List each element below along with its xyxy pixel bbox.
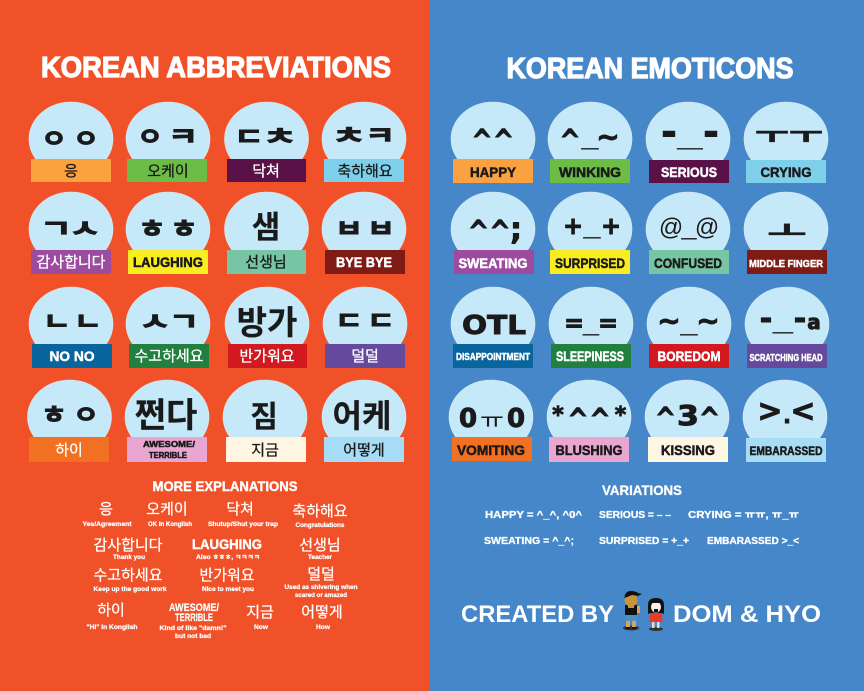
emoticon: happy: [451, 102, 535, 183]
emoticon: surprised: SURPRISED: [555, 255, 625, 271]
explanation: 하이: 하이: [97, 602, 125, 619]
explanation: 덜덜: 덜덜: [307, 566, 335, 583]
explanation: 오케이: OK in Konglish: [148, 521, 192, 528]
emoticon: crying: ㅜㅜ: [755, 123, 823, 148]
face: ㅅㄱ 수고하세요: [126, 287, 210, 368]
face: ㅎㅇ 하이: ㅇ: [73, 402, 99, 429]
variation: crying: CRYING = ㅠㅠ, ㅠ_ㅠ: [688, 510, 799, 521]
heading: more explanations: MORE EXPLANATIONS: [152, 478, 298, 494]
emoticon: winking: ~: [596, 120, 620, 153]
icon: dom character: [623, 591, 642, 630]
emoticon: scratching head: -: [794, 299, 806, 337]
emoticon: blushing: [547, 380, 631, 462]
explanation: 어떻게: 어떻게: [301, 604, 343, 621]
emoticon: middle finger: [744, 192, 828, 274]
panel: korean abbreviations background: [0, 0, 429, 691]
emoticon: winking: WINKING: [559, 164, 621, 180]
face: 샘 선생님: 샘: [252, 210, 280, 245]
emoticon: surprised: +: [563, 212, 583, 240]
panel: korean emoticons background: [429, 0, 864, 691]
face: ㅎㅎ laughing: ㅎ: [138, 216, 166, 243]
explanation: 어떻게: How: [316, 624, 331, 631]
emoticon: confused: @: [659, 214, 683, 241]
title: korean abbreviations: KOREAN ABBREVIATIONS: [41, 52, 391, 84]
face: ㅎㅎ laughing: [126, 192, 210, 274]
emoticon: middle finger: MIDDLE FINGER: [749, 258, 823, 270]
emoticon: blushing: *: [552, 403, 564, 428]
emoticon: embarassed: [743, 380, 827, 462]
emoticon: blushing: BLUSHING: [556, 442, 623, 458]
explanation: 수고하세요: Keep up the good work: [94, 586, 167, 593]
face: ㅂㅂ bye bye: [322, 192, 406, 274]
emoticon: sweating: SWEATING: [458, 255, 528, 271]
emoticon: confused: _: [680, 215, 697, 240]
explanation: awesome/terrible: AWESOME/: [169, 602, 219, 614]
face: ㄷㅊ 닥쳐: [224, 102, 308, 182]
face: ㅎㅎ laughing: ㅎ: [170, 216, 198, 243]
icon: hyo character: [648, 598, 664, 631]
emoticon: scratching head: -: [760, 299, 772, 337]
emoticon: boredom: BOREDOM: [658, 348, 720, 364]
face: ㅇㅇ 응: 응: [64, 163, 78, 180]
face: ㅇㅋ 오케이: [126, 102, 210, 182]
emoticon: sleepiness: =: [598, 309, 618, 337]
face: 짐 지금: 지금: [251, 442, 279, 459]
emoticon: scratching head: SCRATCHING HEAD: [750, 352, 823, 364]
explanation: 반가워요: Nice to meet you: [202, 586, 254, 593]
explanation: awesome/terrible: [160, 602, 226, 640]
emoticon: disappointment: OTL: [462, 311, 526, 341]
emoticon: sweating: ^: [468, 215, 489, 250]
emoticon: scratching head: [745, 287, 829, 368]
face: 쩐다 awesome/terrible: TERRIBLE: [149, 450, 187, 460]
face: 방가 반가워요: 반가워요: [239, 348, 295, 365]
explanation: 선생님: 선생님: [299, 537, 341, 554]
emoticon: embarassed: .: [783, 404, 791, 428]
emoticon: confused: @: [695, 214, 719, 241]
heading: variations: VARIATIONS: [602, 482, 682, 498]
face: ㅅㄱ 수고하세요: ㄱ: [169, 309, 199, 336]
face: ㄱㅅ 감사합니다: [29, 192, 113, 274]
emoticon: vomiting: 0: [507, 404, 525, 434]
face: ㅅㄱ 수고하세요: 수고하세요: [134, 348, 204, 365]
emoticon: embarassed: <: [790, 394, 816, 429]
emoticon: serious: [646, 102, 730, 183]
explanation: 축하해요: [292, 503, 348, 529]
emoticon: surprised: +: [601, 212, 621, 240]
explanation: 오케이: [146, 501, 192, 528]
emoticon: winking: [548, 102, 632, 183]
explanation: 응: 응: [99, 501, 113, 518]
emoticon: crying: CRYING: [760, 164, 812, 180]
face: ㅇㅇ 응: [29, 102, 113, 182]
explanation: 선생님: Teacher: [308, 554, 332, 561]
face: ㅎㅇ 하이: [28, 380, 112, 462]
explanation: awesome/terrible: TERRIBLE: [175, 612, 213, 624]
emoticon: winking: ^: [560, 124, 580, 159]
emoticon: scratching head: _: [771, 309, 794, 334]
emoticon: sleepiness: SLEEPINESS: [556, 348, 624, 364]
variation: embarassed: EMBARASSED >_<: [707, 536, 799, 547]
face: 쩐다 awesome/terrible: [125, 380, 209, 462]
explanation: 닥쳐: [208, 501, 278, 528]
face: ㅇㅇ 응: ㅇ: [41, 126, 67, 153]
emoticon: blushing: *: [615, 403, 627, 428]
face: 짐 지금: [223, 380, 307, 462]
face: ㅇㅋ 오케이: ㅋ: [168, 124, 198, 151]
face: 쩐다 awesome/terrible: AWESOME/: [143, 439, 196, 449]
explanation: 닥쳐: 닥쳐: [226, 501, 254, 518]
explanation: awesome/terrible: but not bad: [175, 633, 211, 640]
explanation: 수고하세요: 수고하세요: [93, 567, 163, 584]
explanation: laughing: LAUGHING: [192, 536, 262, 552]
face: ㅇㅋ 오케이: ㅇ: [137, 124, 163, 151]
face: ㅇㅋ 오케이: 오케이: [147, 163, 189, 180]
face: ㄴㄴ no no: [29, 287, 113, 368]
explanation: 감사합니다: 감사합니다: [93, 537, 163, 554]
explanations list: [82, 501, 358, 640]
face: ㄴㄴ no no: NO NO: [50, 348, 95, 364]
explanation: 하이: "Hi" in Konglish: [86, 624, 138, 631]
explanation: 하이: [86, 602, 138, 631]
emoticon: crying: [744, 102, 828, 183]
face: ㅊㅋ 축하해요: 축하해요: [337, 163, 393, 180]
face: ㄷㄷ 덜덜: 덜덜: [351, 348, 379, 365]
face: ㅊㅋ 축하해요: ㅋ: [365, 123, 395, 150]
face: ㄷㄷ 덜덜: ㄷ: [367, 308, 395, 335]
explanation: 어떻게: [301, 604, 343, 631]
face: ㄷㅊ 닥쳐: 닥쳐: [252, 163, 280, 180]
face: ㅅㄱ 수고하세요: ㅅ: [139, 309, 171, 336]
explanation: 응: Yes/Agreement: [82, 521, 132, 528]
face: ㅂㅂ bye bye: ㅂ: [367, 216, 395, 243]
face: ㄱㅅ 감사합니다: ㅅ: [69, 216, 101, 243]
variation: sweating: SWEATING = ^_^;: [484, 536, 574, 547]
face: ㅂㅂ bye bye: ㅂ: [335, 216, 363, 243]
emoticon: vomiting: [449, 380, 533, 461]
face: 샘 선생님: [224, 192, 308, 274]
emoticon: serious: -: [662, 106, 676, 155]
emoticon: vomiting: ㅠ: [480, 408, 504, 433]
explanation: 반가워요: [199, 567, 255, 593]
face: ㄴㄴ no no: ㄴ: [74, 309, 102, 336]
face: ㅎㅇ 하이: ㅎ: [41, 402, 67, 429]
emoticon: blushing: ^: [568, 403, 588, 438]
explanation: 응: [82, 501, 132, 528]
emoticon: embarassed: EMBARASSED: [750, 444, 823, 458]
emoticon: blushing: ^: [590, 403, 610, 438]
emoticon: sweating: ^: [490, 215, 510, 250]
variation: surprised: SURPRISED = +_+: [599, 536, 689, 547]
emoticon: boredom: [647, 287, 731, 368]
emoticon: boredom: ~: [696, 304, 720, 337]
emoticon: disappointment: [451, 287, 535, 368]
emoticon: surprised: [548, 192, 632, 274]
explanation: 지금: 지금: [246, 604, 274, 621]
emoticon: happy: ^: [472, 124, 492, 159]
face: ㄷㄷ 덜덜: [323, 287, 407, 368]
emoticon: kissing: ^: [699, 402, 720, 437]
face: 샘 선생님: 선생님: [245, 254, 287, 271]
emoticon: sleepiness: =: [564, 309, 584, 337]
emoticon: scratching head: a: [807, 310, 821, 334]
face: ㅎㅇ 하이: 하이: [55, 442, 83, 459]
credit: dom and hyo: DOM & HYO: [673, 601, 821, 628]
face: ㄷㅊ 닥쳐: ㄷ: [234, 124, 264, 151]
emoticon: happy: HAPPY: [470, 164, 517, 180]
face: ㄴㄴ no no: ㄴ: [43, 309, 71, 336]
face: 방가 반가워요: 방가: [237, 304, 297, 341]
emoticon: confused: [646, 192, 730, 274]
explanation: 덜덜: Used as shivering when: [284, 584, 358, 591]
face: ㄱㅅ 감사합니다: 감사합니다: [36, 254, 106, 271]
explanation: 축하해요: 축하해요: [292, 503, 348, 520]
emoticon: confused: CONFUSED: [654, 255, 722, 271]
explanation: 덜덜: [284, 566, 358, 599]
explanation: laughing: Also ㅎㅎㅎ, ㅋㅋㅋㅋ: [196, 554, 260, 561]
face: ㅂㅂ bye bye: BYE BYE: [336, 254, 392, 270]
credit: created by: CREATED BY: [461, 601, 614, 628]
emoticon: happy: ^: [493, 124, 514, 159]
emoticon: disappointment: DISAPPOINTMENT: [456, 351, 530, 363]
face: 쩐다 awesome/terrible: 쩐다: [135, 397, 197, 435]
emoticon: boredom: _: [679, 311, 699, 336]
variation: happy: HAPPY = ^_^, ^0^: [485, 510, 582, 521]
emoticon: vomiting: 0: [459, 404, 477, 434]
emoticon: serious: SERIOUS: [661, 164, 717, 180]
emoticon: winking: _: [580, 125, 600, 150]
emoticon: embarassed: >: [757, 394, 783, 429]
emoticon: sleepiness: _: [582, 311, 600, 336]
emoticon: middle finger: ㅗ: [767, 218, 807, 245]
face: ㄷㄷ 덜덜: ㄷ: [335, 308, 363, 335]
emoticon: vomiting: VOMITING: [457, 442, 525, 458]
emoticon: sleepiness: [549, 287, 633, 368]
emoticon: kissing: ^: [655, 402, 676, 437]
explanation: 수고하세요: [93, 567, 167, 593]
emoticon: serious: -: [704, 106, 718, 155]
face: ㄱㅅ 감사합니다: ㄱ: [40, 216, 72, 243]
explanation: 닥쳐: Shutup/Shut your trap: [208, 521, 278, 528]
explanation: awesome/terrible: Kind of like "damn!": [160, 625, 226, 632]
explanation: 축하해요: Congratulations: [296, 522, 345, 529]
face: ㅎㅎ laughing: LAUGHING: [133, 254, 203, 270]
emoticon: kissing: KISSING: [661, 442, 715, 458]
emoticon: boredom: ~: [657, 304, 681, 337]
explanation: 지금: [246, 604, 274, 631]
explanation: 반가워요: 반가워요: [199, 567, 255, 584]
face: ㅊㅋ 축하해요: ㅊ: [332, 123, 366, 150]
face: 짐 지금: 짐: [250, 401, 278, 434]
emoticon: kissing: [645, 380, 729, 462]
emoticon: sweating: [451, 192, 535, 274]
explanation: 오케이: 오케이: [146, 501, 188, 518]
face: 방가 반가워요: [225, 287, 309, 368]
emoticon: kissing: 3: [677, 399, 699, 432]
title: korean emoticons: KOREAN EMOTICONS: [506, 53, 794, 85]
face: 어케 어떻게: [322, 380, 406, 462]
emoticon: serious: _: [675, 125, 704, 150]
face: 어케 어떻게: 어케: [333, 398, 391, 434]
variations list: [484, 510, 799, 547]
explanation: 덜덜: scared or amazed: [295, 592, 347, 599]
emoticon: surprised: _: [582, 214, 602, 239]
emoticon: sweating: ;: [510, 212, 522, 247]
explanation: laughing: [192, 536, 262, 561]
variation: serious: SERIOUS = – –: [599, 510, 671, 521]
face: 어케 어떻게: 어떻게: [343, 442, 385, 459]
face: ㄷㅊ 닥쳐: ㅊ: [263, 124, 297, 151]
face: ㅇㅇ 응: ㅇ: [73, 126, 99, 153]
face: ㅊㅋ 축하해요: [322, 102, 406, 182]
explanation: 감사합니다: Thank you: [113, 554, 145, 561]
explanation: 지금: Now: [254, 624, 269, 631]
